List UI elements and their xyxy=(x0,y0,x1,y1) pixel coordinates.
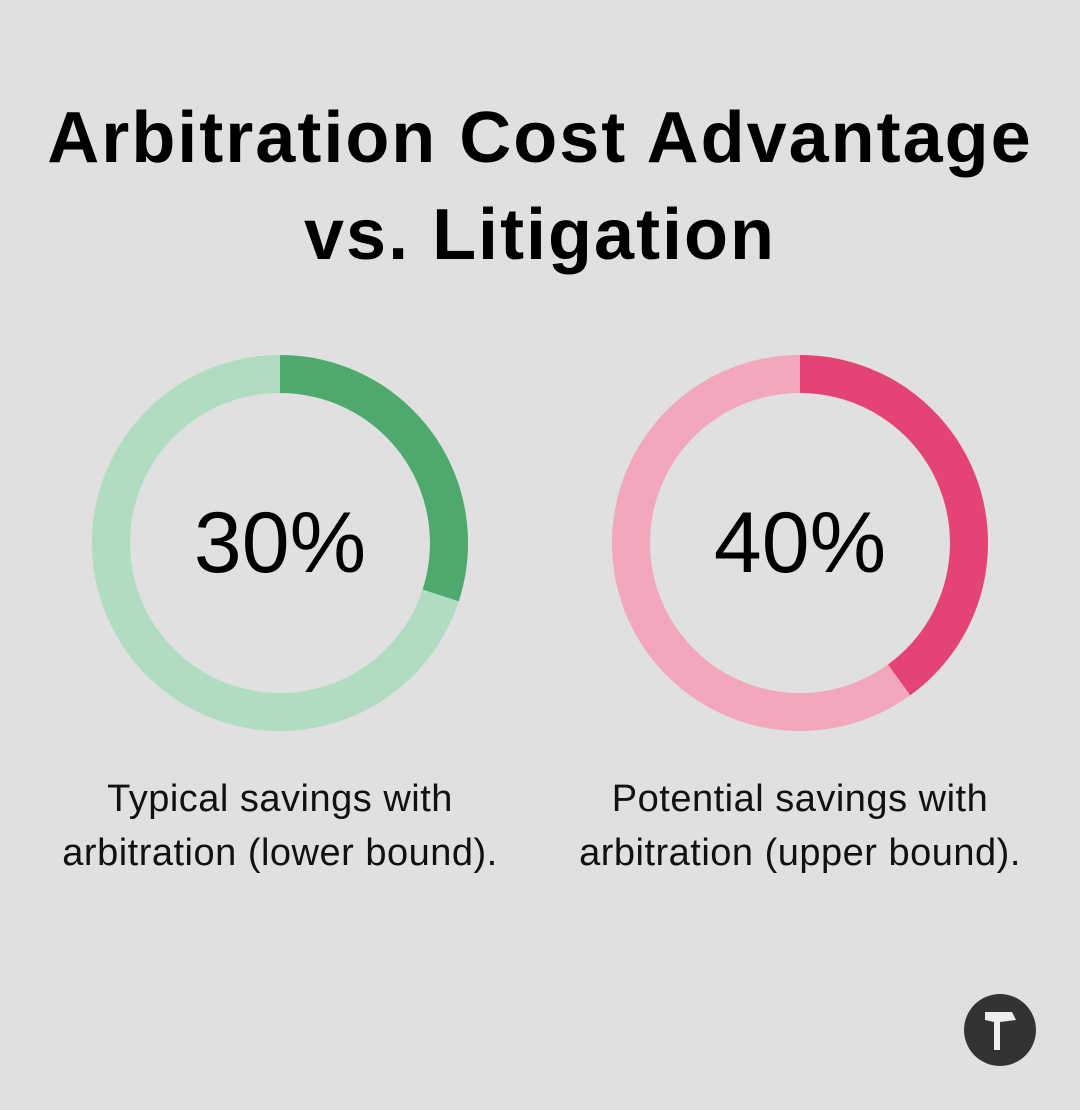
donut 1: 30% xyxy=(194,495,366,591)
caption 2: arbitration (upper bound). xyxy=(579,832,1021,874)
caption 2 xyxy=(579,778,1021,874)
donut 1 xyxy=(111,374,449,712)
title: vs. Litigation xyxy=(304,195,776,275)
donut 2: 40% xyxy=(714,495,886,591)
caption 1 xyxy=(62,778,498,874)
title: Arbitration Cost Advantage xyxy=(47,98,1033,178)
icon: logo xyxy=(964,994,1036,1066)
title xyxy=(47,98,1033,275)
caption 1: arbitration (lower bound). xyxy=(62,832,498,874)
caption 1: Typical savings with xyxy=(107,778,453,820)
donut 2 xyxy=(631,374,969,712)
caption 2: Potential savings with xyxy=(612,778,988,820)
